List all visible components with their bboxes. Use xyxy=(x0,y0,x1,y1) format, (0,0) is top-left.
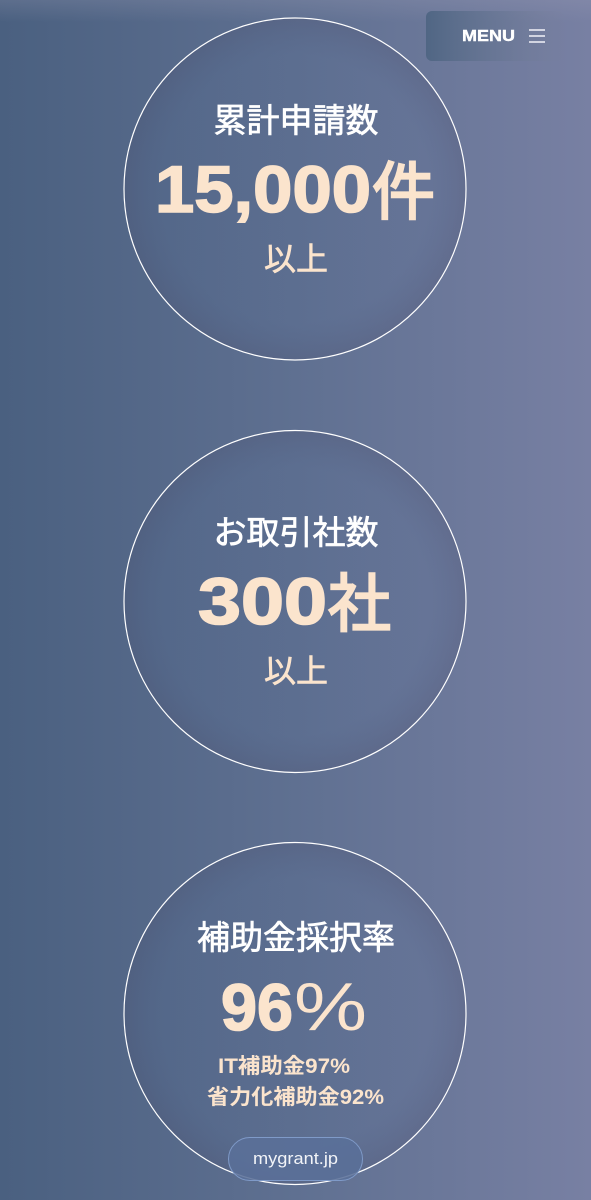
icon: hamburger xyxy=(529,30,545,42)
button: mygrant.jp: mygrant.jp xyxy=(253,1150,338,1168)
panel: client companies xyxy=(124,430,466,772)
text: or more: 以上 xyxy=(264,241,328,277)
text: labor-saving subsidy 92%: 省力化補助金92% xyxy=(207,1086,384,1109)
heading: cumulative applications: 累計申請数 xyxy=(214,102,378,139)
number: 15,000件: 件 xyxy=(372,158,435,228)
text: IT subsidy 97%: IT補助金97% xyxy=(218,1055,350,1078)
number: 96% xyxy=(221,969,367,1045)
text: or more: 以上 xyxy=(264,653,328,689)
number: 300社: 社 xyxy=(328,570,391,640)
number: 96%: % xyxy=(294,969,367,1045)
menu button xyxy=(426,11,564,61)
number: 15,000件: 15,000 xyxy=(155,152,371,226)
number: 300社 xyxy=(198,564,391,640)
number: 300社: 300 xyxy=(198,564,327,638)
heading: client companies: お取引社数 xyxy=(214,514,378,551)
heading: subsidy adoption rate: 補助金採択率 xyxy=(197,919,395,956)
panel: subsidy adoption rate xyxy=(124,842,466,1184)
number: 96%: 96 xyxy=(221,970,293,1044)
button: mygrant.jp xyxy=(228,1138,362,1180)
label: MENU: MENU xyxy=(462,28,515,45)
panel: cumulative applications xyxy=(124,18,466,360)
